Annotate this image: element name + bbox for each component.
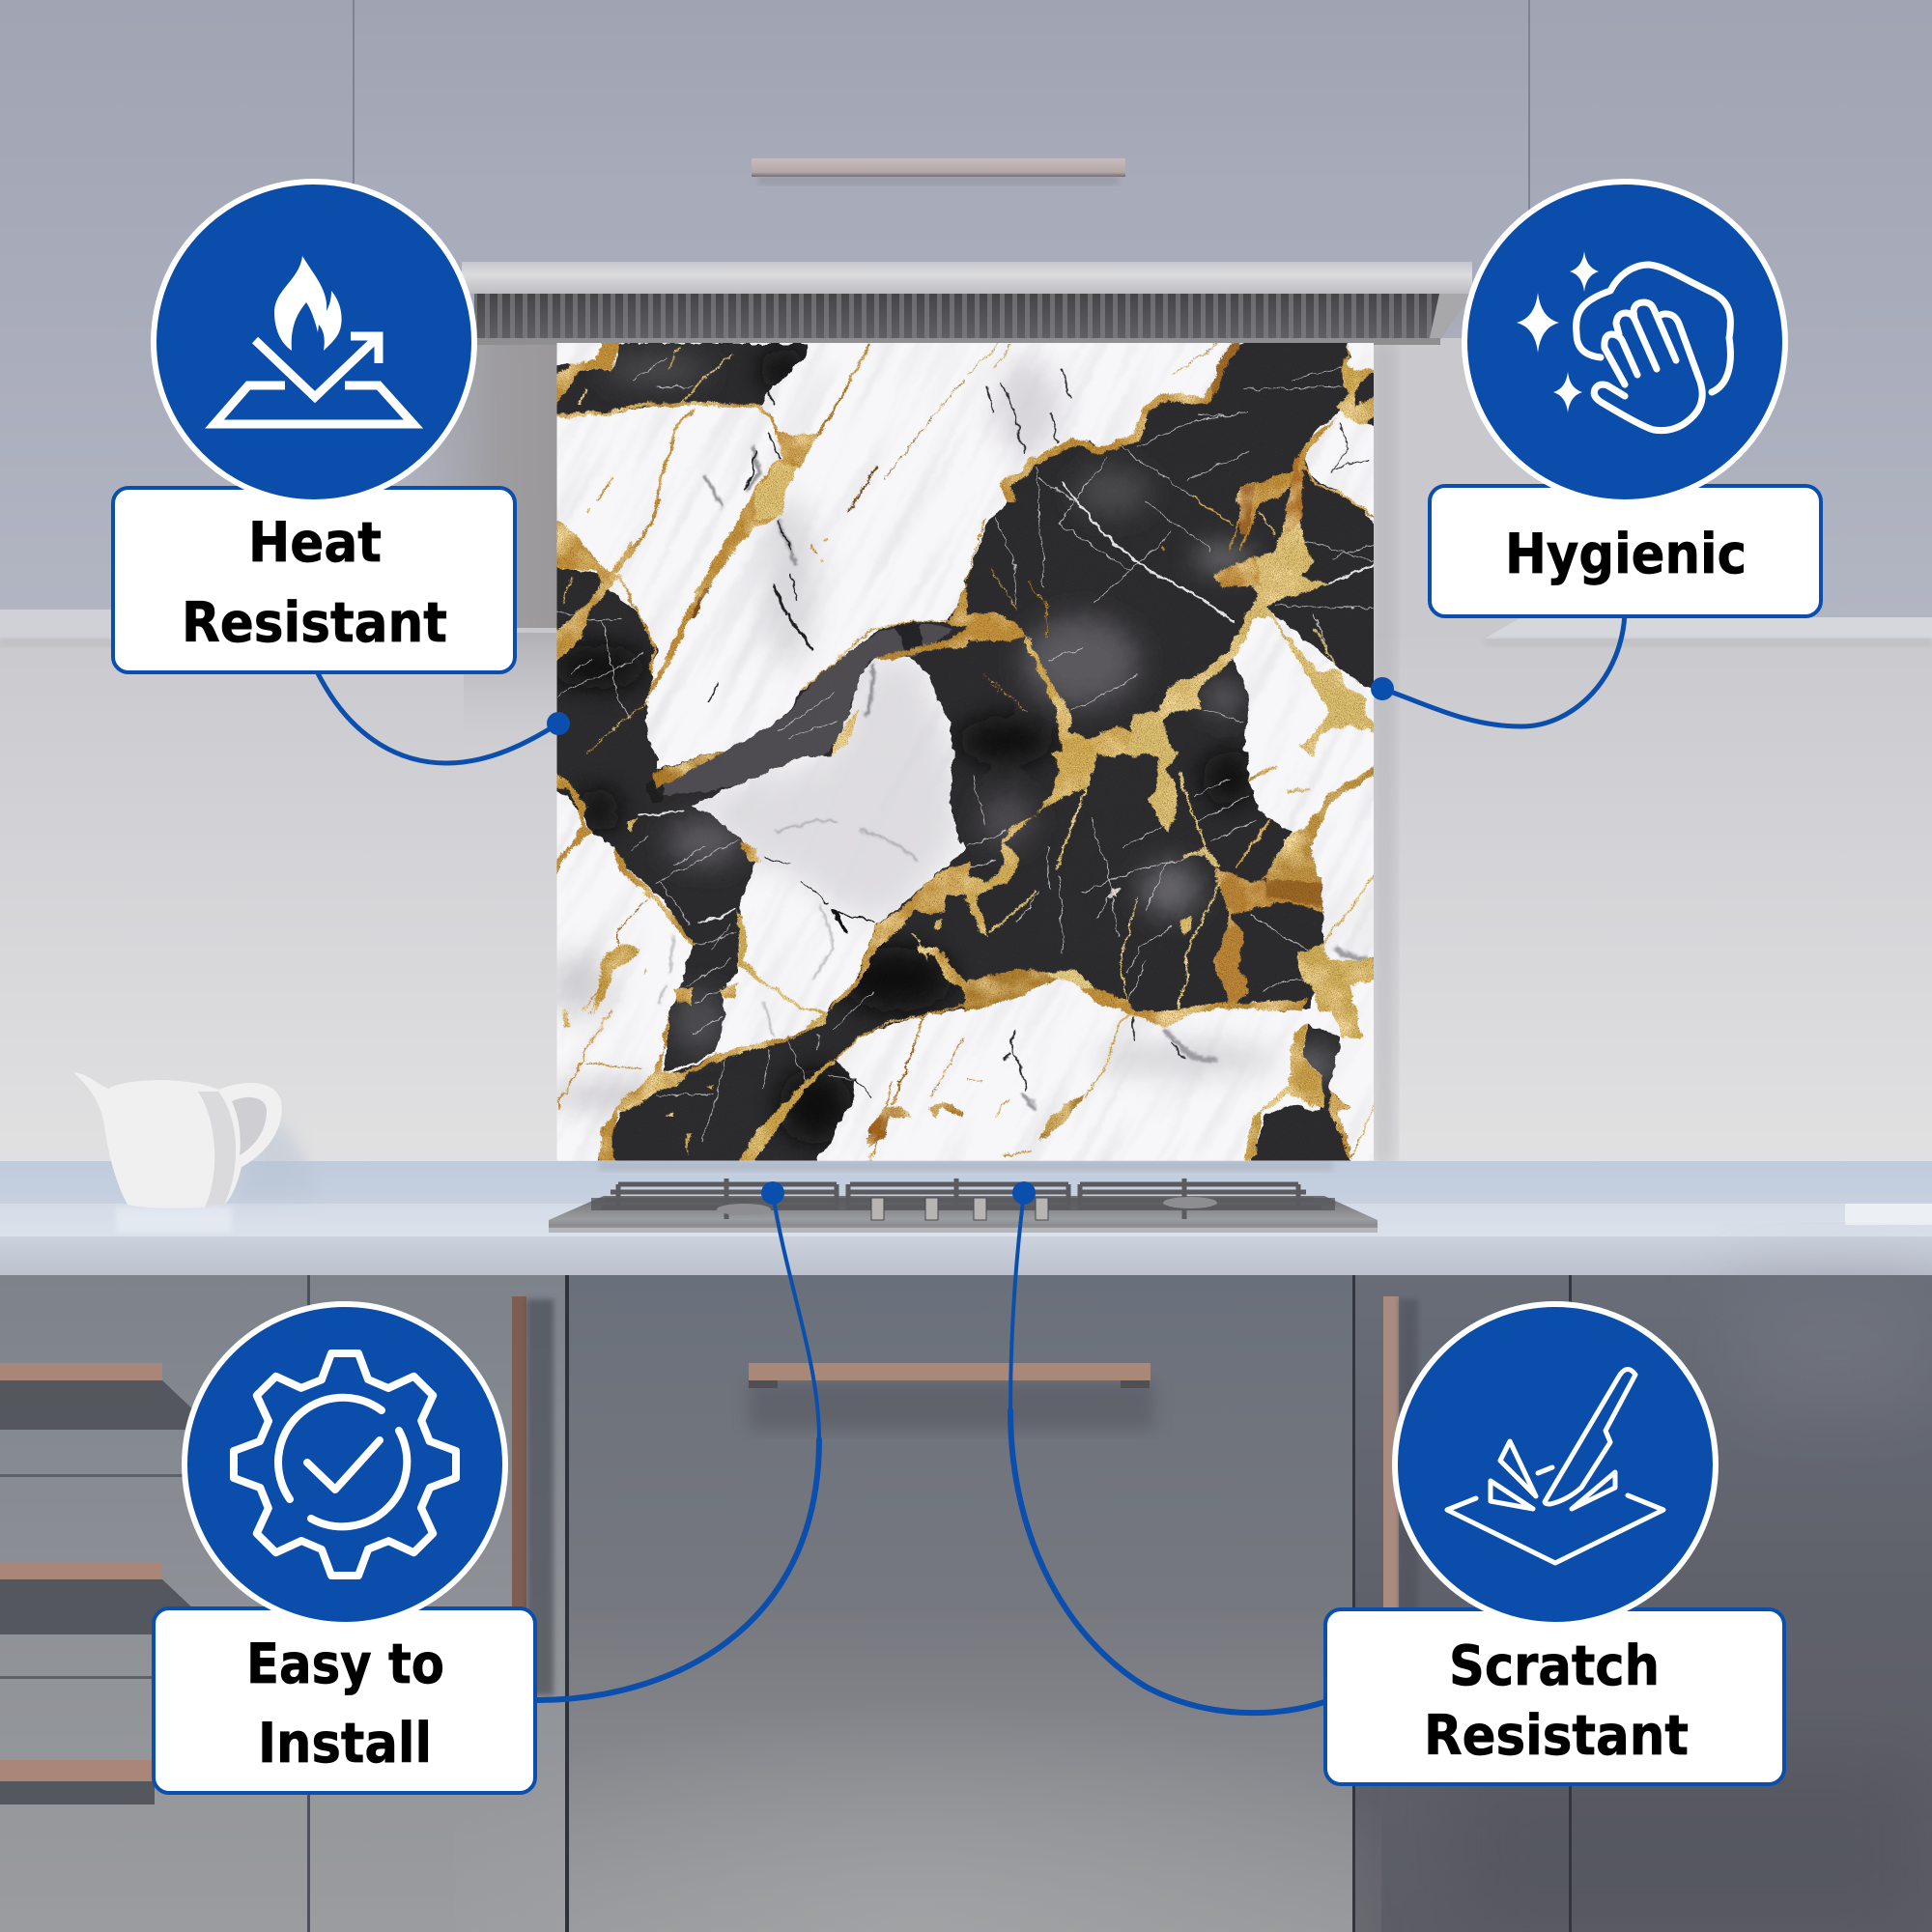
- dark and grey veins on the white: [660, 370, 1369, 1108]
- white hairline veins: [557, 357, 1374, 1140]
- upper cabinet handle: [752, 158, 1125, 185]
- label box: scratch resistant: [1325, 1609, 1784, 1784]
- mid-grey band: [651, 624, 953, 796]
- label box: easy to install: Easy to: [246, 1633, 444, 1696]
- icon: heat badge: [154, 182, 474, 502]
- label box: heat resistant: Heat: [248, 511, 382, 575]
- callout: heat resistant: [113, 182, 515, 672]
- lower cabinets: [0, 1275, 1932, 1932]
- connector: scratch resistant: [1010, 1193, 1324, 1713]
- label box: scratch resistant: Resistant: [1424, 1704, 1689, 1768]
- callout: hygienic: [1430, 182, 1821, 616]
- gold: top-right quadrant: [964, 341, 1385, 755]
- connector: easy to install: [537, 1194, 819, 1700]
- gold: top-left quadrant: [551, 341, 968, 757]
- upper cabinets: [0, 0, 1932, 618]
- label box: heat resistant: Resistant: [182, 591, 447, 655]
- wall: [0, 338, 1932, 1169]
- icon: hygienic badge: [1464, 182, 1785, 502]
- white marble base: [556, 343, 1374, 1161]
- connector: hygienic: [1382, 611, 1625, 726]
- gold: bottom-left quadrant: [551, 752, 970, 1173]
- under-cabinet shelves: [0, 610, 1932, 646]
- label box: scratch resistant: Scratch: [1449, 1634, 1660, 1698]
- countertop: [0, 1161, 1932, 1275]
- gold veins: [551, 341, 1385, 1173]
- icon: knife scratch badge: [1395, 1304, 1716, 1625]
- black marble regions: [556, 343, 1374, 1161]
- cabinet handles: [0, 1296, 1418, 1804]
- callout: easy to install: [154, 1304, 535, 1793]
- connector: heat resistant: [316, 669, 558, 763]
- label box: hygienic: [1430, 486, 1821, 616]
- label box: easy to install: Install: [258, 1712, 432, 1776]
- callout: scratch resistant: [1325, 1304, 1784, 1784]
- label box: hygienic: Hygienic: [1505, 523, 1747, 586]
- teapot: [73, 1072, 319, 1233]
- connector lines: [316, 611, 1625, 1713]
- gold: bottom-right quadrant: [964, 752, 1385, 1169]
- icon: gear with check badge: [185, 1304, 505, 1625]
- gas hob: [549, 1179, 1378, 1233]
- marble splashback panel: [556, 343, 1374, 1161]
- label box: heat resistant: [113, 488, 515, 672]
- cooker hood: [462, 262, 1472, 345]
- label box: easy to install: [154, 1608, 535, 1793]
- connector dots: [547, 677, 1394, 1205]
